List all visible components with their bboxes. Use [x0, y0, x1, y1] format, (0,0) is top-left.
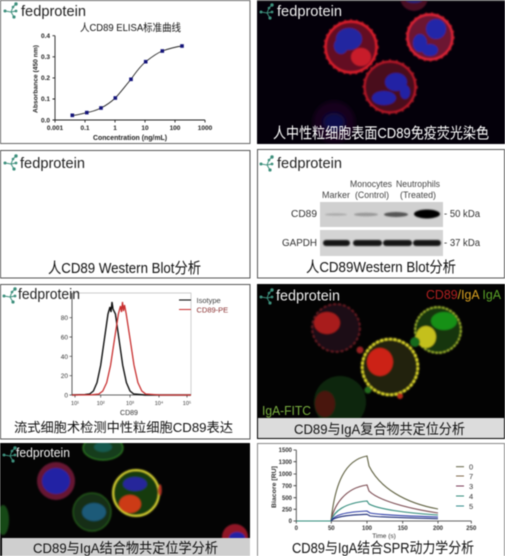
fluorescence micrograph: red cells with blue nuclei [313, 0, 454, 143]
line chart: absorbance vs concentration: 0.0 [41, 118, 50, 124]
channel label: IgA-FITC: IgA-FITC [262, 404, 311, 418]
chart title: 人CD89 ELISA标准曲线 [80, 21, 181, 34]
line chart: SPR sensorgram: 200 [433, 526, 444, 532]
lane labels: Neutrophils [396, 179, 440, 189]
line chart: absorbance vs concentration: Absorbance (450 nm) [32, 45, 40, 113]
legend: 4 [469, 492, 473, 501]
blot: CD89 [320, 202, 443, 227]
line chart: absorbance vs concentration [32, 33, 213, 142]
blot labels: - 50 kDa [444, 209, 480, 220]
legend: 3 [469, 482, 473, 491]
line chart: absorbance vs concentration: 10 [141, 125, 149, 132]
panel: human CD89 Western Blot with bands [258, 150, 504, 278]
line chart: absorbance vs concentration: 100 [170, 125, 181, 132]
histogram: CD89 expression: 10⁴ [155, 400, 164, 407]
legend: 7 [469, 472, 473, 481]
panel: flow cytometry [0, 284, 250, 439]
panel: neutrophil surface CD89 immunofluorescence [257, 0, 505, 144]
line chart: SPR sensorgram: 150 [398, 526, 408, 532]
histogram: CD89 expression: 20 [61, 373, 68, 380]
legend: 5 [469, 502, 473, 511]
legend [456, 462, 473, 511]
line chart: absorbance vs concentration: 0.4 [41, 33, 50, 40]
blot labels [282, 209, 480, 249]
panel: CD89 and IgA binding colocalization [0, 436, 250, 556]
legend: 0 [469, 462, 473, 472]
histogram: CD89 expression: 40 [61, 354, 68, 361]
histogram: CD89 expression: 0 [64, 392, 68, 400]
blot: GAPDH [320, 230, 443, 256]
line chart: SPR sensorgram: 1500 [279, 448, 293, 454]
lane labels: (Treated) [400, 190, 436, 200]
legend [179, 296, 228, 314]
lane labels: Monocytes [350, 179, 392, 189]
panel: SPR kinetics [258, 444, 504, 556]
logo: fedprotein: fedprotein [16, 445, 70, 460]
logo: fedprotein: fedprotein [277, 3, 342, 20]
caption band [258, 418, 504, 438]
histogram: CD89 expression: 10¹ [71, 401, 79, 407]
blot labels: CD89 [291, 209, 317, 220]
line chart: SPR sensorgram: 250 [466, 526, 477, 532]
blot labels: - 37 kDa [444, 238, 480, 249]
fluorescence micrograph: cells with yellow and green rims [312, 304, 461, 428]
line chart: SPR sensorgram: Biacore [RU] [271, 466, 278, 508]
blot labels: GAPDH [282, 238, 317, 249]
logo: fedprotein: fedprotein [21, 3, 86, 20]
line chart: absorbance vs concentration: 1 [113, 125, 117, 132]
line chart: absorbance vs concentration: 0.3 [41, 54, 50, 61]
caption band: CD89与IgA复合物共定位分析 [294, 421, 465, 437]
channel label: CD89/IgA IgA [426, 288, 502, 302]
lane labels: Marker [322, 190, 350, 200]
line chart: absorbance vs concentration: 0.001 [47, 125, 64, 132]
line chart: SPR sensorgram: 700 [282, 484, 293, 490]
panel: human CD89 Western Blot (empty) [0, 150, 250, 278]
histogram: CD89 expression [61, 293, 191, 417]
caption band: CD89与IgA结合物共定位学分析 [33, 540, 218, 556]
line chart: SPR sensorgram: 500 [282, 496, 293, 502]
line chart: absorbance vs concentration: 0.2 [41, 75, 50, 82]
line chart: absorbance vs concentration: 1000 [198, 125, 213, 132]
panel: CD89 and IgA complex colocalization [257, 284, 505, 439]
logo: fedprotein [2, 445, 70, 463]
line chart: SPR sensorgram: 250 [282, 508, 293, 514]
line chart: SPR sensorgram [271, 448, 477, 540]
line chart: SPR sensorgram: 50 [328, 526, 335, 532]
legend: CD89-PE [196, 306, 228, 314]
line chart: absorbance vs concentration: 0.1 [80, 125, 90, 132]
line chart: SPR sensorgram: 1000 [279, 472, 293, 478]
lane labels [322, 179, 440, 200]
histogram: CD89 expression: 10² [97, 401, 105, 407]
histogram: CD89 expression: CD89 [120, 410, 138, 417]
line chart: SPR sensorgram: 0 [289, 519, 293, 525]
fluorescence micrograph: cells with blue and red nuclei [0, 442, 250, 539]
histogram: CD89 expression: 10⁵ [183, 400, 191, 407]
logo: fedprotein: fedprotein [276, 288, 340, 304]
panel: ELISA standard curve [0, 0, 250, 144]
line chart: SPR sensorgram: 0 [295, 526, 299, 532]
line chart: SPR sensorgram: Time (s) [372, 533, 396, 540]
line chart: absorbance vs concentration: 0.1 [41, 96, 50, 103]
logo: fedprotein: fedprotein [18, 286, 80, 303]
line chart: SPR sensorgram: 100 [362, 526, 373, 532]
legend: Isotype [196, 296, 221, 305]
caption: 人CD89Western Blot分析 [306, 259, 456, 276]
line chart: SPR sensorgram: 1300 [279, 460, 293, 466]
line chart: absorbance vs concentration: Concentration (ng/mL) [93, 135, 167, 142]
caption: 人CD89 Western Blot分析 [48, 260, 201, 277]
histogram: CD89 expression: 10³ [126, 401, 134, 407]
histogram: CD89 expression: 80 [61, 315, 68, 322]
logo: fedprotein: fedprotein [20, 155, 85, 172]
histogram: CD89 expression: 60 [61, 334, 68, 342]
lane labels: (Control) [355, 190, 389, 200]
logo: fedprotein: fedprotein [277, 155, 342, 172]
caption: 流式细胞术检测中性粒细胞CD89表达 [14, 420, 233, 435]
